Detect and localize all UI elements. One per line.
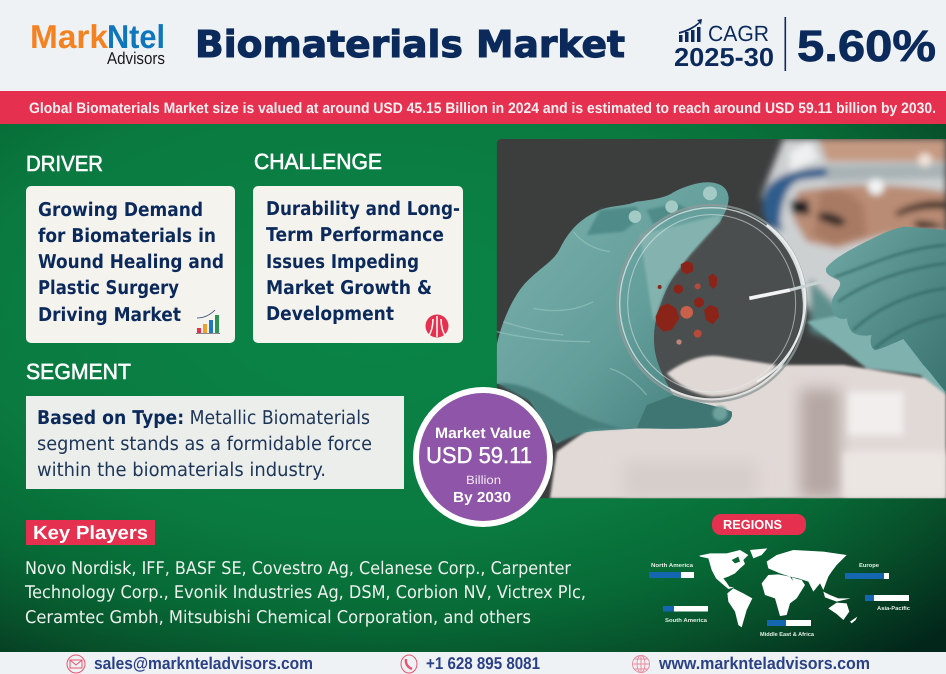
heading: DRIVER: DRIVER bbox=[26, 151, 103, 176]
website: www.marknteladvisors.com bbox=[658, 654, 870, 673]
right glove bbox=[826, 227, 946, 392]
CAGR block: 2025-30 bbox=[674, 42, 774, 72]
market value badge: Market Value bbox=[435, 425, 531, 442]
region bar: South America: South America bbox=[665, 617, 708, 624]
email address: sales@marknteladvisors.com bbox=[94, 654, 313, 673]
region bar: North America bbox=[649, 562, 694, 578]
photo: gloved hands holding petri dish bbox=[497, 139, 946, 498]
region bar: North America: North America bbox=[651, 562, 694, 569]
panel: driver: Growing Demand bbox=[38, 199, 203, 221]
icon: bar chart bbox=[196, 310, 220, 334]
icon: globe bbox=[632, 656, 650, 672]
red summary banner bbox=[0, 91, 946, 124]
panel: challenge: Issues Impeding bbox=[266, 251, 419, 273]
logo: MarkNtel Advisors: Advisors bbox=[107, 49, 165, 68]
hood and face bbox=[762, 139, 946, 348]
icon: phone bbox=[401, 655, 417, 673]
region bar: Middle East & Africa bbox=[760, 620, 815, 638]
market value badge: By 2030 bbox=[453, 490, 511, 506]
panel: driver: Plastic Surgery bbox=[38, 277, 180, 299]
panel: challenge: Durability and Long- bbox=[266, 198, 460, 220]
panel: challenge bbox=[253, 186, 463, 343]
region bar: Middle East & Africa: Middle East & Africa bbox=[760, 631, 815, 638]
panel: driver bbox=[26, 186, 235, 343]
regions pill: REGIONS bbox=[723, 517, 782, 532]
panel: driver: for Biomaterials in bbox=[38, 225, 216, 247]
CAGR block: 5.60% bbox=[797, 22, 936, 71]
panel: challenge: Market Growth & bbox=[266, 277, 432, 299]
region bar: Europe bbox=[845, 563, 889, 579]
region bar: Europe: Europe bbox=[859, 563, 879, 569]
swab bbox=[749, 290, 790, 298]
icon: growth chart bbox=[679, 19, 702, 42]
phone number: +1 628 895 8081 bbox=[426, 654, 540, 673]
heading: SEGMENT: SEGMENT bbox=[26, 359, 131, 384]
region bar: Asia-Pacific: Asia-Pacific bbox=[877, 605, 910, 612]
panel: driver: Driving Market bbox=[38, 304, 181, 326]
market value badge: Billion bbox=[466, 473, 501, 487]
key players label: Key Players bbox=[33, 523, 148, 544]
panel: segment: segment stands as a formidable force bbox=[37, 433, 372, 455]
header band bbox=[0, 0, 946, 91]
world map bbox=[699, 548, 857, 627]
key players list bbox=[24, 559, 586, 628]
dish interior bbox=[654, 210, 802, 398]
title: Biomaterials Market bbox=[195, 23, 625, 66]
panel: segment: Based on Type: Metallic Biomaterials bbox=[37, 407, 370, 429]
market value badge: USD 59.11 bbox=[426, 442, 532, 468]
lab suit bbox=[550, 312, 946, 498]
left glove bbox=[497, 182, 732, 443]
key players list: Novo Nordisk, IFF, BASF SE, Covestro Ag, Celanese Corp., Carpenter bbox=[25, 559, 572, 579]
heading: CHALLENGE: CHALLENGE bbox=[254, 149, 382, 174]
region bar: South America bbox=[663, 606, 708, 624]
region bar: Asia-Pacific bbox=[865, 595, 910, 612]
logo: MarkNtel Advisors: Ntel bbox=[107, 18, 165, 55]
logo: MarkNtel Advisors bbox=[30, 18, 165, 68]
logo: MarkNtel Advisors: Mark bbox=[30, 18, 109, 55]
icon: email bbox=[67, 655, 85, 673]
panel: segment bbox=[26, 396, 404, 489]
footer band bbox=[0, 652, 946, 674]
green background bbox=[0, 124, 946, 652]
CAGR block bbox=[674, 17, 936, 72]
petri dish rim bbox=[617, 205, 806, 402]
icon: declining arrows bbox=[426, 314, 448, 338]
key players list: Ceramtec Gmbh, Mitsubishi Chemical Corporation, and others bbox=[25, 608, 531, 628]
key players list: Technology Corp., Evonik Industries Ag, DSM, Corbion NV, Victrex Plc, bbox=[24, 583, 586, 603]
regions pill bbox=[712, 514, 806, 535]
panel: segment: within the biomaterials industry. bbox=[37, 459, 326, 481]
panel: driver: Wound Healing and bbox=[38, 251, 224, 273]
specimen colonies bbox=[656, 261, 719, 345]
CAGR block: CAGR bbox=[708, 21, 769, 46]
panel: challenge: Term Performance bbox=[266, 224, 444, 246]
market value badge bbox=[413, 387, 553, 527]
panel: challenge: Development bbox=[266, 303, 394, 325]
